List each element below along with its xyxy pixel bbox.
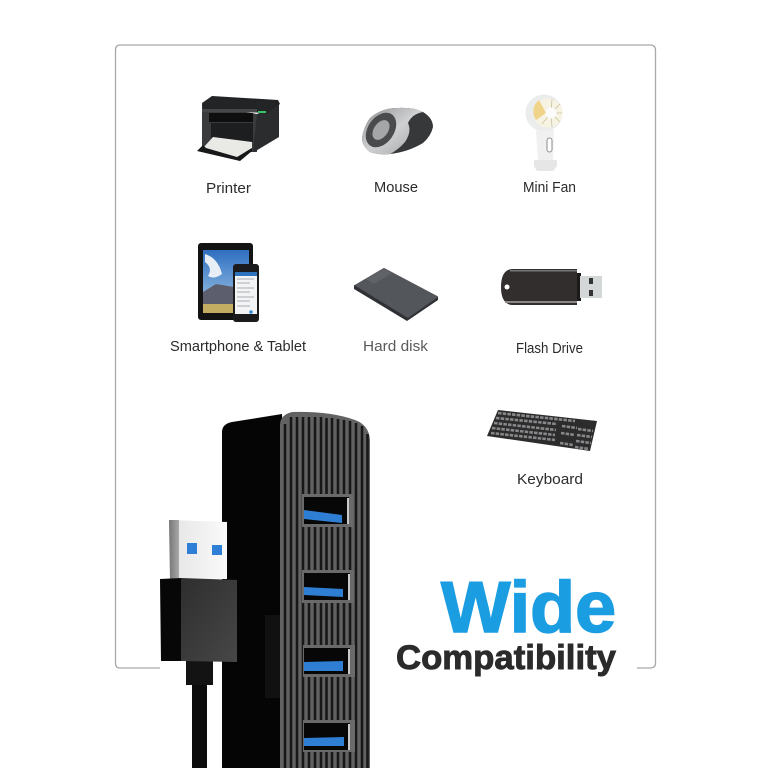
label: Keyboard: Keyboard (517, 472, 583, 488)
icon: flash drive (501, 269, 602, 305)
hub side (222, 414, 290, 768)
icon: hard disk (354, 269, 438, 321)
port 3 (303, 645, 355, 677)
USB hub (222, 405, 373, 768)
icon: smartphone and tablet (198, 243, 259, 322)
label: Flash Drive: Flash Drive (516, 341, 583, 357)
USB plug and cable (160, 520, 237, 768)
heading: Wide: Wide (441, 568, 616, 648)
plug housing (160, 578, 181, 661)
infographic (114, 44, 656, 768)
hub front face (278, 405, 373, 768)
icon: printer (197, 96, 280, 161)
frame panel (116, 45, 656, 668)
icon: keyboard (487, 410, 597, 451)
heading: Compatibility: Compatibility (396, 639, 616, 677)
port 4 (303, 720, 355, 752)
label: Hard disk: Hard disk (363, 339, 429, 355)
label: Smartphone & Tablet: Smartphone & Tablet (170, 339, 306, 355)
icon: mini fan (526, 94, 562, 171)
port 1 (302, 494, 353, 527)
label: Mouse: Mouse (374, 180, 418, 196)
cable (192, 680, 207, 768)
label: Mini Fan: Mini Fan (523, 180, 576, 196)
metal connector (169, 520, 227, 579)
label: Printer: Printer (206, 181, 251, 197)
icon: mouse (359, 107, 433, 154)
port 2 (302, 570, 354, 603)
